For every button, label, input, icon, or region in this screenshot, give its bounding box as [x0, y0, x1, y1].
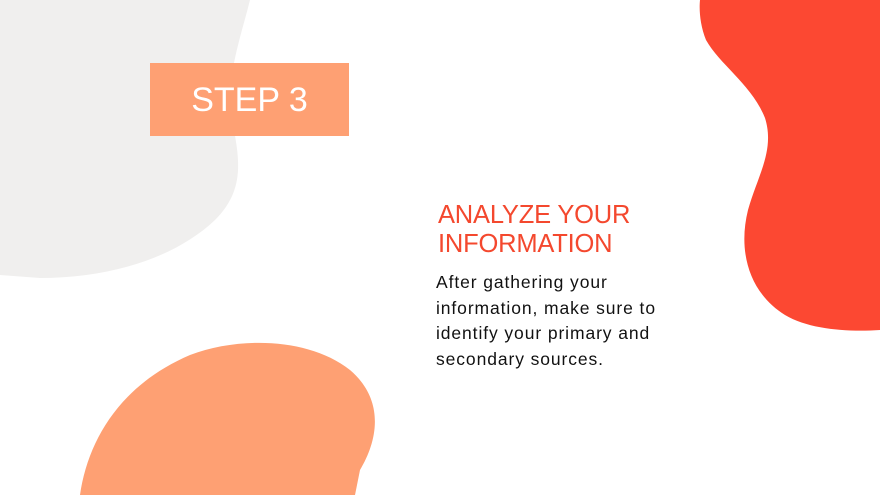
body text: secondary sources. [436, 348, 604, 368]
blob: red right [700, 0, 880, 331]
heading: INFORMATION [438, 230, 612, 258]
body text [436, 272, 656, 368]
step label box: STEP 3 [191, 81, 308, 119]
step label box [150, 63, 349, 136]
heading: ANALYZE YOUR [438, 201, 630, 229]
body text: After gathering your [436, 272, 608, 292]
body text: information, make sure to [436, 298, 656, 318]
heading [438, 201, 630, 258]
blob: grey top-left [0, 0, 250, 278]
blob: orange bottom [80, 343, 375, 495]
body text: identify your primary and [436, 323, 650, 343]
